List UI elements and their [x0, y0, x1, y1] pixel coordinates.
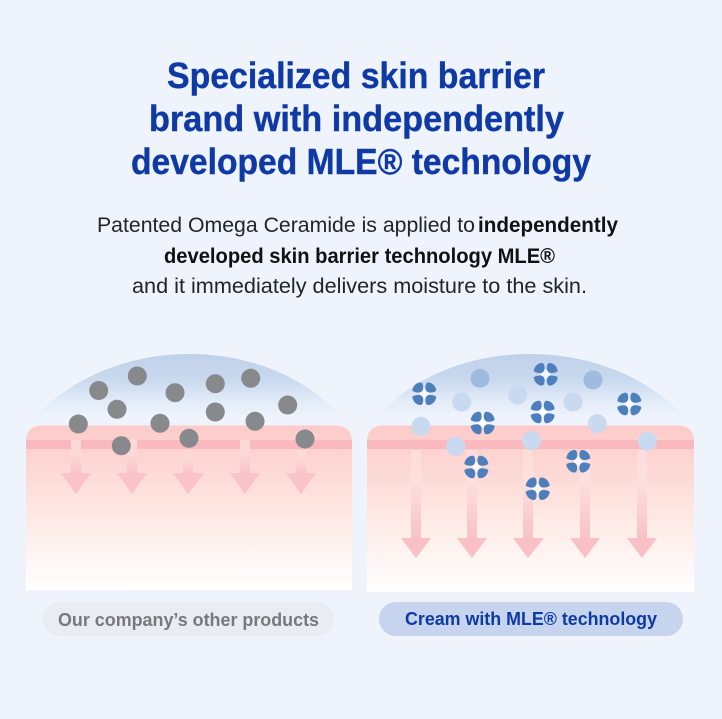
- particles: grey: [69, 366, 314, 455]
- title: Specialized skin barrier: [167, 55, 545, 96]
- title: developed MLE® technology: [131, 141, 591, 182]
- skin block: right: [367, 426, 694, 592]
- particles: MLE clovers: [412, 363, 641, 500]
- description text: [97, 213, 618, 298]
- label pill: other products: [43, 602, 334, 636]
- skin band: right: [367, 440, 694, 449]
- description text: independently: [478, 213, 618, 237]
- label pill: cream with MLE: [379, 602, 683, 636]
- description text: developed skin barrier technology MLE®: [164, 244, 555, 268]
- description text: and it immediately delivers moisture to the skin.: [132, 274, 587, 298]
- label pill: other products: Our company’s other products: [58, 609, 319, 630]
- particles: light blue: [412, 369, 657, 456]
- skin band: left: [26, 440, 352, 449]
- panel: cream with MLE: [367, 354, 694, 636]
- title: [131, 55, 591, 182]
- label pill: cream with MLE: Cream with MLE® technology: [405, 608, 658, 629]
- skin block: left: [26, 426, 352, 590]
- arrows: right: [401, 450, 657, 558]
- description text: Patented Omega Ceramide is applied to: [97, 213, 475, 237]
- dome: right: [378, 354, 684, 416]
- dome: left: [36, 354, 341, 416]
- title: brand with independently: [149, 98, 564, 139]
- panel: other products: [26, 354, 352, 636]
- arrows: left: [61, 440, 316, 494]
